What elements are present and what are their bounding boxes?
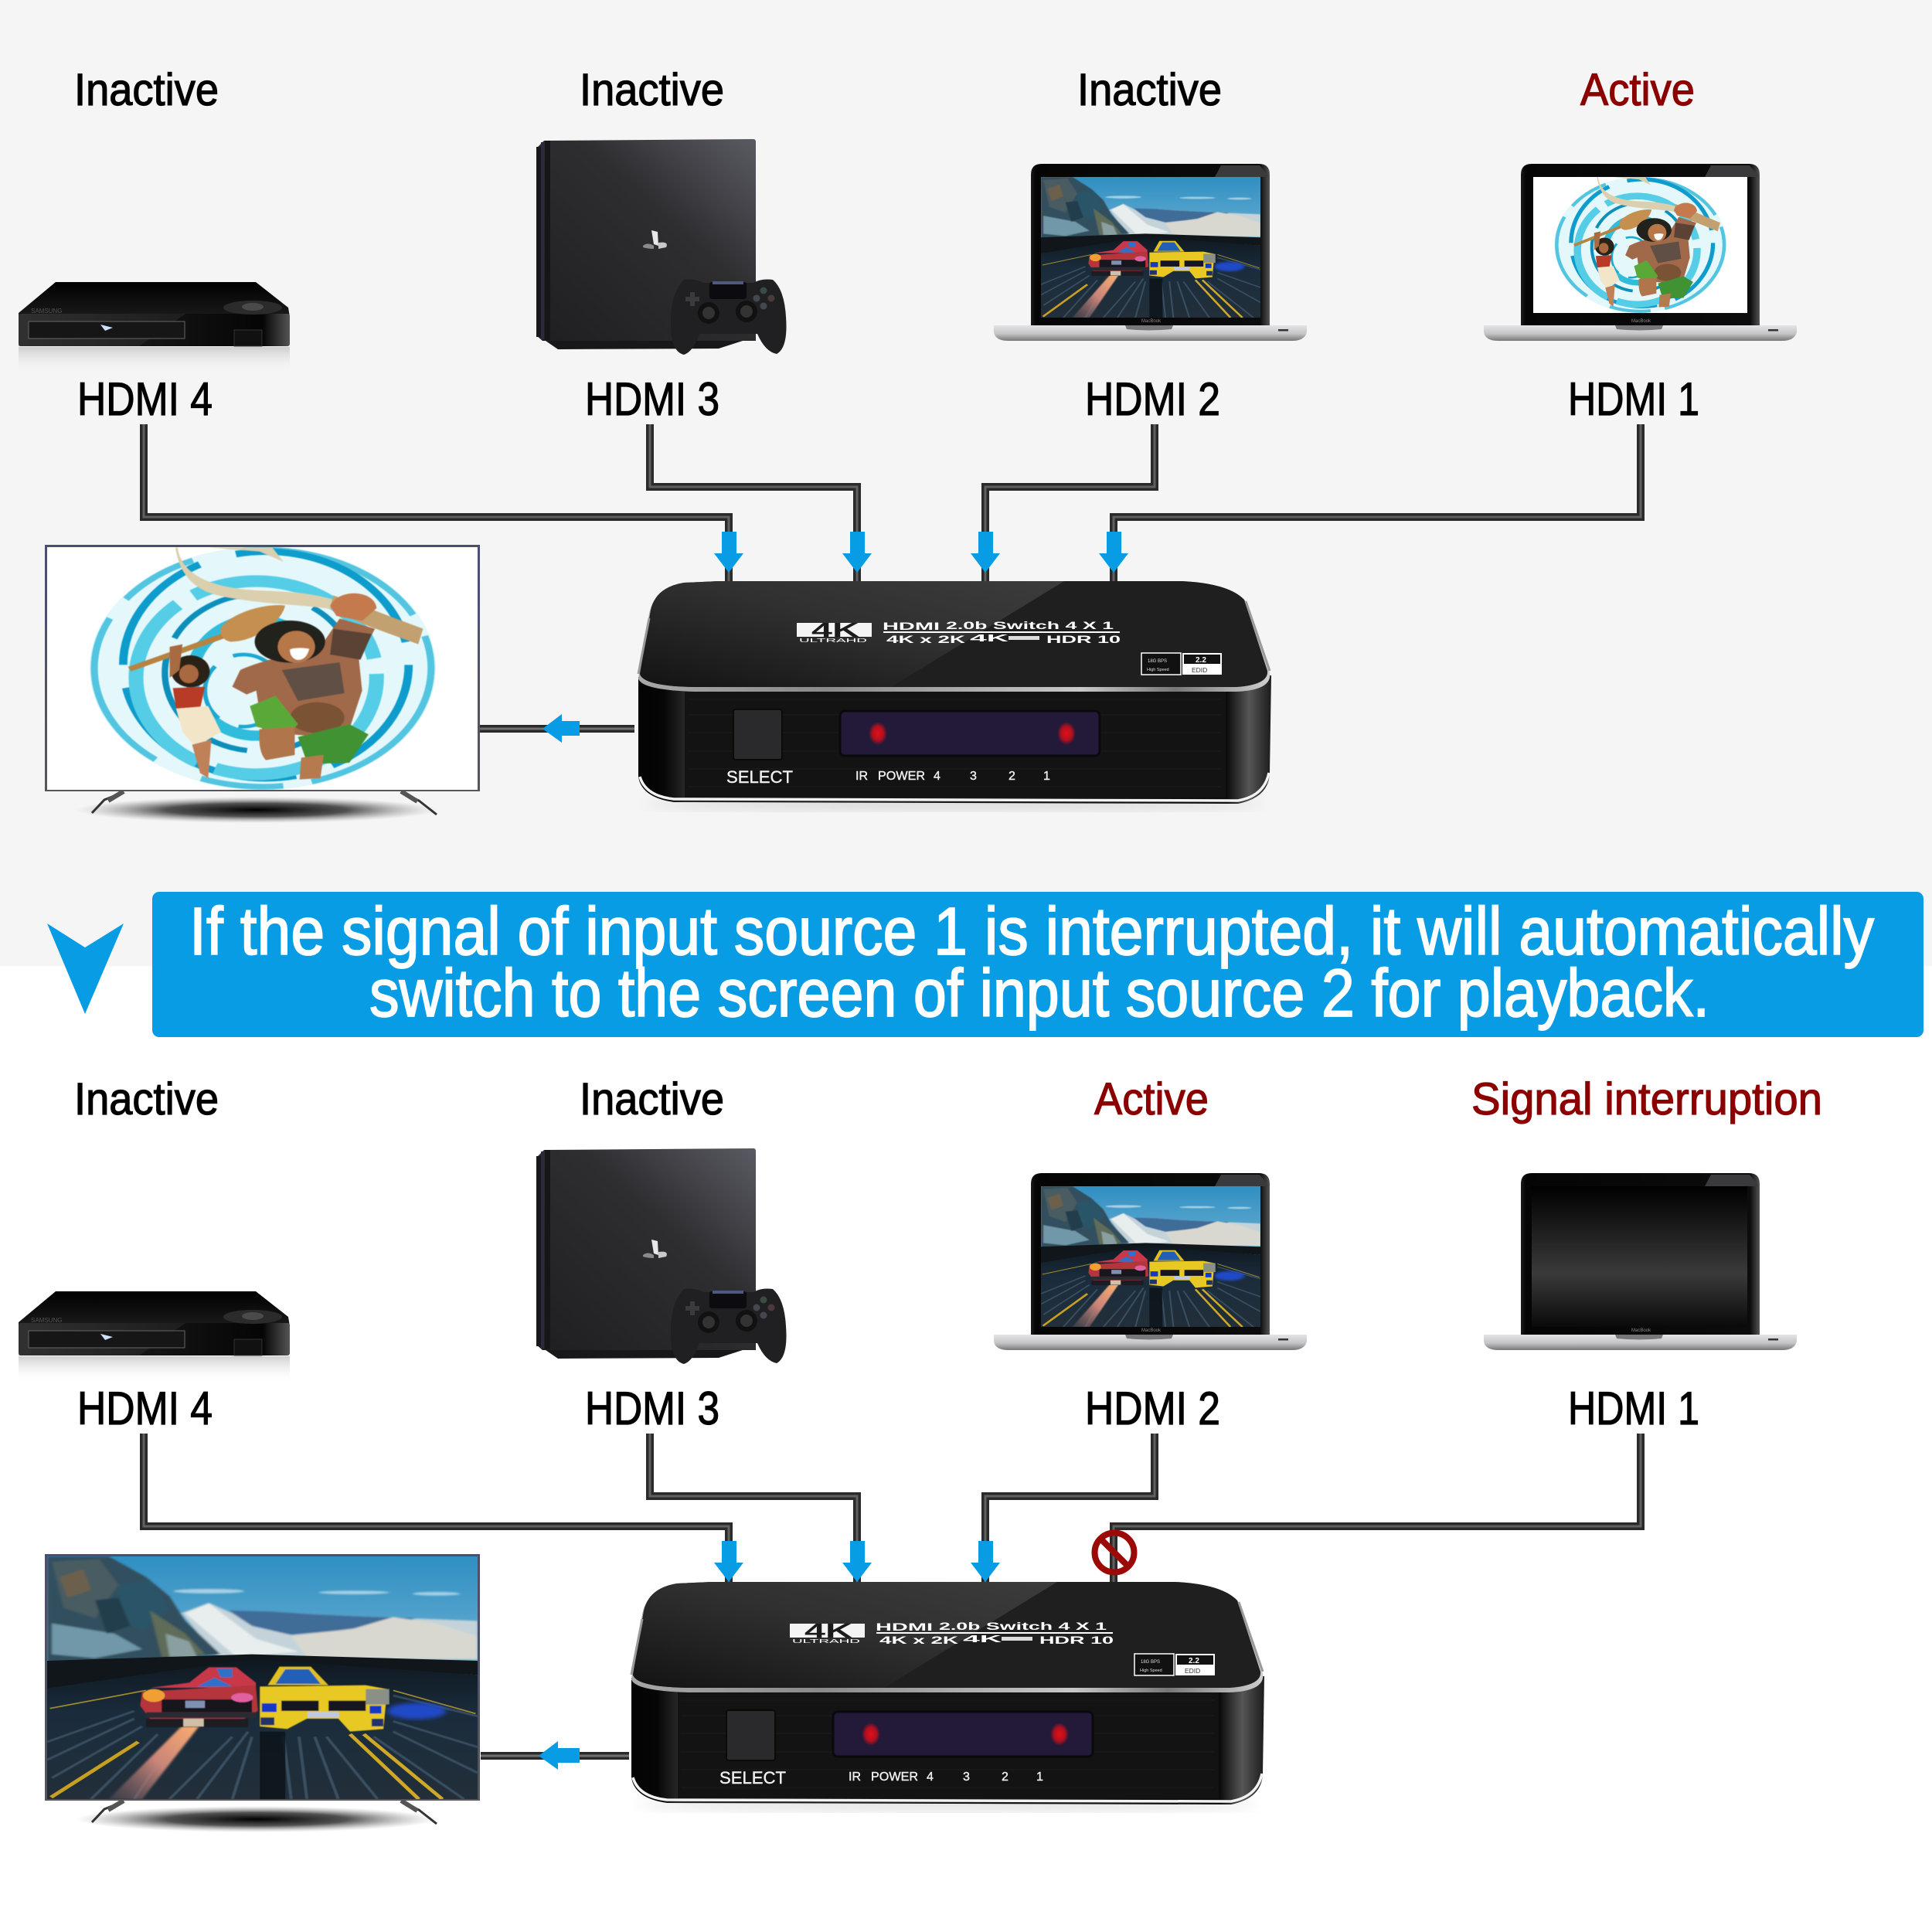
port label: HDMI 4: HDMI 4 xyxy=(77,373,213,425)
port label: HDMI 1: HDMI 1 xyxy=(1568,1383,1699,1434)
icon: laptop HDMI 1 showing water movie: MacBook xyxy=(1631,319,1651,324)
cables: four inputs to switch xyxy=(144,1434,1641,1588)
badge: 18G BPS high speed: High Speed xyxy=(1140,1668,1162,1673)
badge: 2.2 EDID xyxy=(1175,1654,1215,1675)
switch front labels: 1 xyxy=(1036,1770,1043,1784)
switch front labels: 2 xyxy=(1009,770,1015,783)
icon: laptop HDMI 2 showing race game xyxy=(994,1173,1307,1350)
icon: no signal symbol on HDMI 1 xyxy=(1094,1533,1134,1572)
switch front labels: 3 xyxy=(970,770,977,783)
badge: 18G BPS high speed: 18G BPS xyxy=(1148,659,1167,664)
arrow: HDMI 4 input xyxy=(714,532,743,573)
switch top label: 4K xyxy=(963,1633,1003,1645)
arrow: HDMI 1 input xyxy=(1099,532,1128,573)
switch front labels: 4 xyxy=(927,1770,934,1784)
switch front labels: POWER xyxy=(878,770,925,783)
port label: HDMI 4: HDMI 4 xyxy=(77,1383,213,1434)
badge: 18G BPS high speed xyxy=(1141,653,1181,675)
badge: 2.2 EDID: EDID xyxy=(1192,666,1207,674)
switch top label: 4K xyxy=(970,632,1010,644)
switch top label: ULTRAHD xyxy=(792,1638,861,1645)
switch box xyxy=(631,1582,1264,1811)
switch top label: ULTRAHD xyxy=(799,637,868,644)
arrow: HDMI 2 input xyxy=(971,532,1000,573)
arrow: HDMI 3 input xyxy=(842,1541,872,1582)
banner: transition arrow xyxy=(47,923,124,1014)
port label: HDMI 3: HDMI 3 xyxy=(585,373,719,425)
switch front labels: 3 xyxy=(963,1770,970,1784)
switch top label: 4K x 2K xyxy=(886,633,965,645)
icon: game console and controller xyxy=(536,1148,787,1364)
background: bottom white section xyxy=(0,966,1932,1932)
switch top label: 2.0b Switch 4 X 1 xyxy=(946,619,1114,631)
panel: top diagram, HDMI 1 active xyxy=(19,65,1797,823)
switch top label xyxy=(790,1619,1114,1646)
background: top grey section xyxy=(0,0,1932,966)
icon: laptop HDMI 2 showing race game xyxy=(994,164,1307,341)
switch top label: HDR 10 xyxy=(1039,1634,1114,1646)
arrow: HDMI 2 input xyxy=(971,1541,1000,1582)
icon: laptop HDMI 1 with blank screen xyxy=(1484,1173,1797,1350)
switch top label: 2.0b Switch 4 X 1 xyxy=(939,1620,1107,1632)
arrow: output to TV xyxy=(543,714,580,743)
icon: TV showing water movie xyxy=(45,545,480,823)
status label: HDMI 1 signal interruption: Signal interruption xyxy=(1471,1074,1822,1124)
switch top label xyxy=(797,618,1121,645)
port label: HDMI 2: HDMI 2 xyxy=(1085,1383,1220,1434)
banner: explanation text: switch to the screen of input source 2 for playback. xyxy=(369,956,1709,1031)
switch top label: 4K xyxy=(804,1619,852,1642)
output cable xyxy=(481,1752,629,1760)
icon: blu-ray player xyxy=(19,282,290,373)
icon: blu-ray player xyxy=(19,1291,290,1383)
badge: 2.2 EDID: EDID xyxy=(1185,1667,1200,1675)
switch front labels: SELECT xyxy=(726,767,793,787)
switch top label: HDR 10 xyxy=(1046,633,1121,645)
icon: laptop HDMI 1 showing water movie xyxy=(1484,164,1797,341)
badge: 18G BPS high speed xyxy=(1134,1654,1174,1675)
icon: TV showing race game xyxy=(45,1554,480,1832)
status label: HDMI 3 inactive: Inactive xyxy=(580,1074,724,1124)
switch front labels: 1 xyxy=(1043,770,1050,783)
badge: 2.2 EDID: 2.2 xyxy=(1189,1657,1199,1665)
switch box xyxy=(638,581,1271,811)
badge: 2.2 EDID xyxy=(1182,653,1222,675)
switch front labels xyxy=(719,1768,1043,1787)
arrow: output to TV xyxy=(539,1741,580,1770)
status label: HDMI 3 inactive: Inactive xyxy=(580,65,724,115)
output cable xyxy=(480,725,634,733)
icon: game console and controller xyxy=(536,139,787,355)
port label: HDMI 2: HDMI 2 xyxy=(1085,373,1220,425)
switch front labels xyxy=(726,767,1050,787)
badge: 2.2 EDID: 2.2 xyxy=(1196,656,1206,665)
cables: four inputs to switch xyxy=(144,424,1641,583)
status label: HDMI 1 active: Active xyxy=(1580,65,1695,115)
icon: blu-ray player: SAMSUNG xyxy=(31,308,62,315)
switch top label: 4K x 2K xyxy=(879,1634,958,1646)
switch front labels: IR xyxy=(849,1770,861,1784)
switch front labels: 2 xyxy=(1002,1770,1009,1784)
switch front labels: POWER xyxy=(871,1770,918,1784)
switch top label: HDMI xyxy=(883,620,940,632)
icon: laptop HDMI 2 showing race game: MacBook xyxy=(1141,319,1162,324)
badge: 18G BPS high speed: 18G BPS xyxy=(1141,1660,1160,1665)
banner: explanation text xyxy=(152,892,1923,1037)
switch top label: 4K xyxy=(811,618,859,641)
icon: blu-ray player: SAMSUNG xyxy=(31,1317,62,1324)
status label: HDMI 4 inactive: Inactive xyxy=(74,65,219,115)
switch front labels: 4 xyxy=(934,770,940,783)
switch top label: HDMI xyxy=(876,1621,933,1633)
port label: HDMI 3: HDMI 3 xyxy=(585,1383,719,1434)
status label: HDMI 2 inactive: Inactive xyxy=(1077,65,1222,115)
switch front labels: IR xyxy=(855,770,868,783)
status label: HDMI 2 active: Active xyxy=(1094,1074,1209,1124)
port label: HDMI 1: HDMI 1 xyxy=(1568,373,1699,425)
badge: 18G BPS high speed: High Speed xyxy=(1147,668,1169,672)
arrow: HDMI 3 input xyxy=(842,532,872,573)
arrow: HDMI 4 input xyxy=(714,1541,743,1582)
icon: laptop HDMI 2 showing race game: MacBook xyxy=(1141,1328,1162,1333)
status label: HDMI 4 inactive: Inactive xyxy=(74,1074,219,1124)
icon: laptop HDMI 1 with blank screen: MacBook xyxy=(1631,1328,1651,1333)
panel: bottom diagram, HDMI 2 active after interruption xyxy=(19,1074,1822,1832)
switch front labels: SELECT xyxy=(719,1768,786,1787)
